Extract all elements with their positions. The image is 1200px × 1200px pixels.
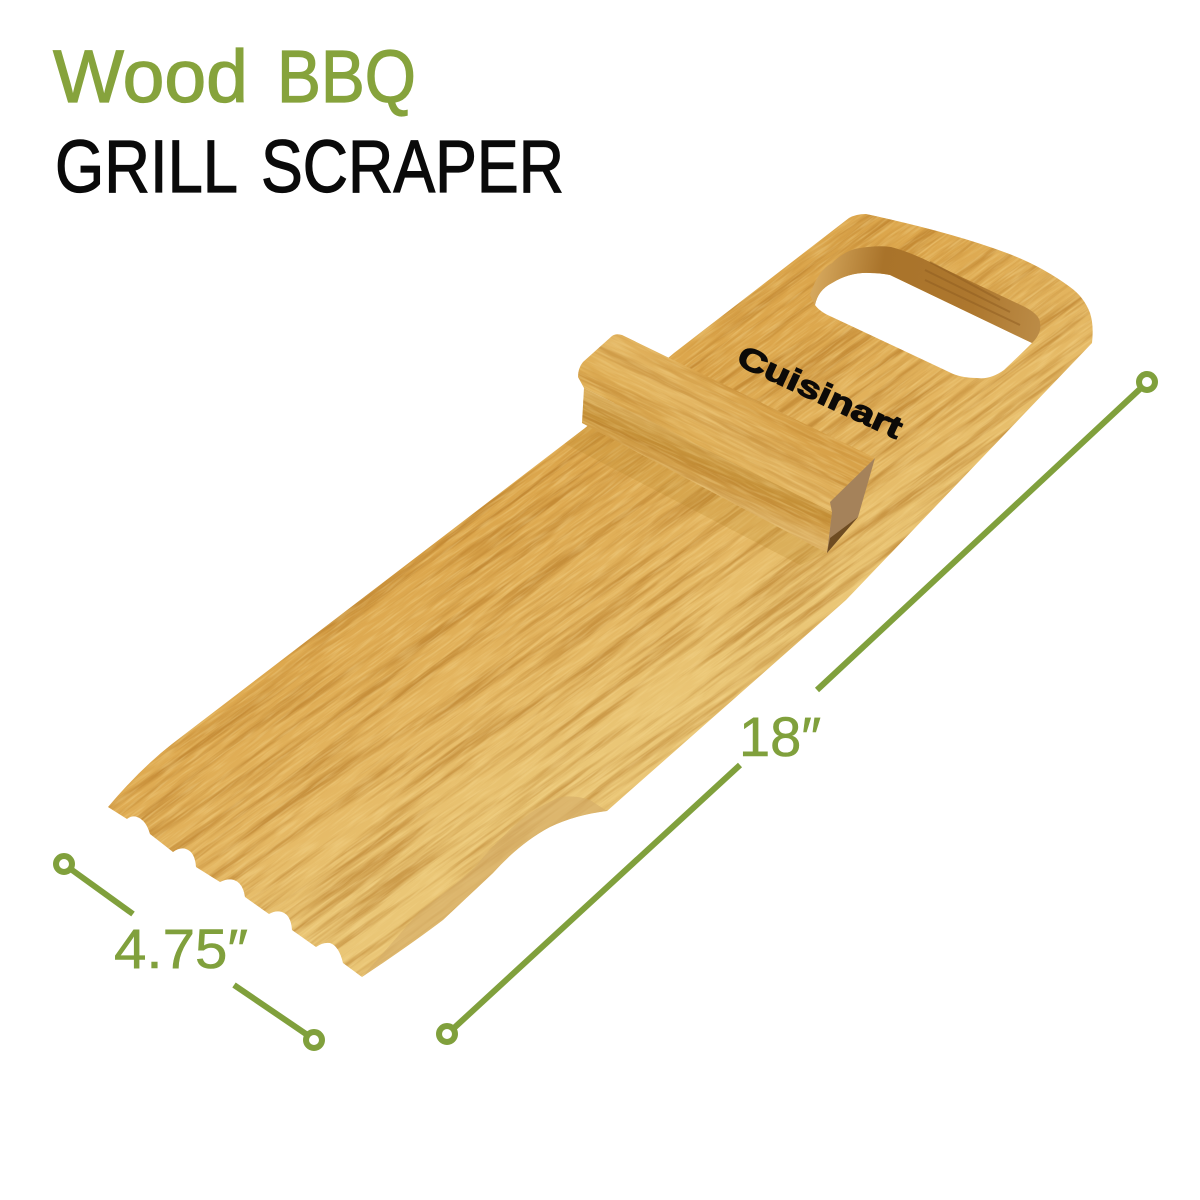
title [53,35,564,208]
bar grain [578,336,874,546]
title: SCRAPER [261,125,564,208]
bar front face [582,388,832,553]
title: BBQ [277,35,416,118]
bar top face [578,334,875,512]
bar shadow on board [560,423,827,565]
handle hole wall [810,246,1040,343]
label: 4.75 in: 4.75″ [114,917,248,980]
bar end grain cut [827,458,875,553]
title: Wood [53,35,248,118]
title: GRILL [55,125,238,208]
front bevel [362,796,607,977]
dimension line: length 18 in [439,374,1155,1042]
wooden grill scraper [108,214,1093,977]
raised bar [578,334,875,553]
Cuisinart logo: Cuisinart [732,339,908,446]
label: 18 in: 18″ [739,705,821,768]
grain [108,214,1093,976]
dimension line: width 4.75 in [56,856,322,1048]
scraper board [108,214,1093,977]
